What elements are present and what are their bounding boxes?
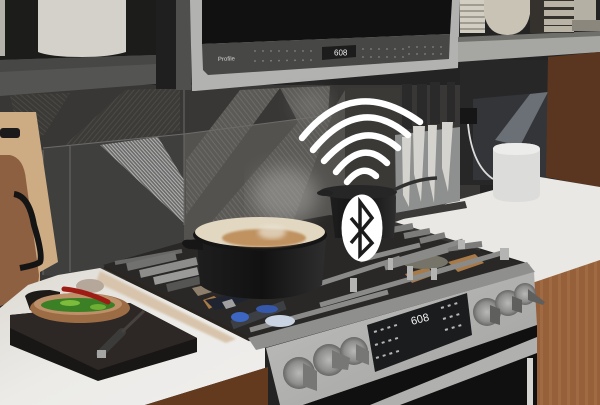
panel buttons [254, 47, 444, 61]
chrome uprights [350, 240, 509, 292]
right backsplash panel [460, 60, 550, 185]
left grate rail [115, 251, 182, 263]
right burner cap [402, 255, 448, 269]
plates far right [572, 0, 600, 31]
light strip beside door [527, 358, 533, 405]
warm counter reflection [96, 271, 236, 343]
oven handle [370, 337, 537, 405]
back right grate fingers [387, 226, 482, 249]
right grate rails [250, 241, 505, 330]
clock display [322, 45, 356, 60]
white canister [38, 0, 126, 57]
knife block [395, 82, 467, 220]
control face [266, 272, 537, 405]
icon: wifi signal [302, 101, 420, 182]
cooktop front rail [104, 267, 250, 340]
block base [395, 201, 467, 220]
base wood under counter [145, 367, 268, 405]
wood wall right [546, 52, 600, 188]
warm reflections [192, 254, 484, 309]
small back pot [317, 178, 437, 238]
range front [248, 262, 545, 405]
knobs left [283, 337, 369, 391]
cooktop [103, 215, 530, 343]
brand label: Profile [218, 56, 236, 63]
microwave [190, 0, 460, 91]
lower right wood cabinet [532, 260, 600, 405]
folded towels [530, 0, 574, 33]
large pot [182, 217, 327, 299]
steam [252, 91, 330, 223]
left grate fingers [127, 256, 200, 288]
food [222, 229, 306, 247]
clock display: 608 [334, 48, 348, 58]
knobs right [473, 283, 545, 326]
left white countertop [0, 268, 265, 405]
microwave side column [156, 0, 191, 90]
stainless deck [248, 262, 535, 350]
right shelf [458, 0, 600, 62]
pot interior [195, 217, 325, 247]
bowls [484, 0, 530, 35]
leather handle [14, 194, 41, 268]
cutting boards [0, 112, 58, 306]
backsplash [0, 85, 480, 280]
range display panel: 608 [410, 312, 431, 328]
smart speaker [493, 143, 540, 202]
range display panel [367, 293, 472, 372]
control panel [202, 34, 450, 75]
white countertop right [395, 177, 600, 283]
green peppers [41, 298, 115, 312]
steam over food [258, 225, 286, 239]
bowl of peppers [25, 279, 130, 323]
upper left cabinet [0, 0, 158, 96]
oven door [303, 325, 537, 405]
icon: bluetooth badge [342, 194, 382, 262]
dark serving board [10, 303, 197, 381]
board knife [97, 311, 144, 358]
power outlet and cord [460, 108, 493, 179]
knives [402, 82, 455, 207]
front burner parts [205, 293, 295, 327]
stacked plates [460, 0, 485, 33]
red chillies [64, 289, 108, 302]
